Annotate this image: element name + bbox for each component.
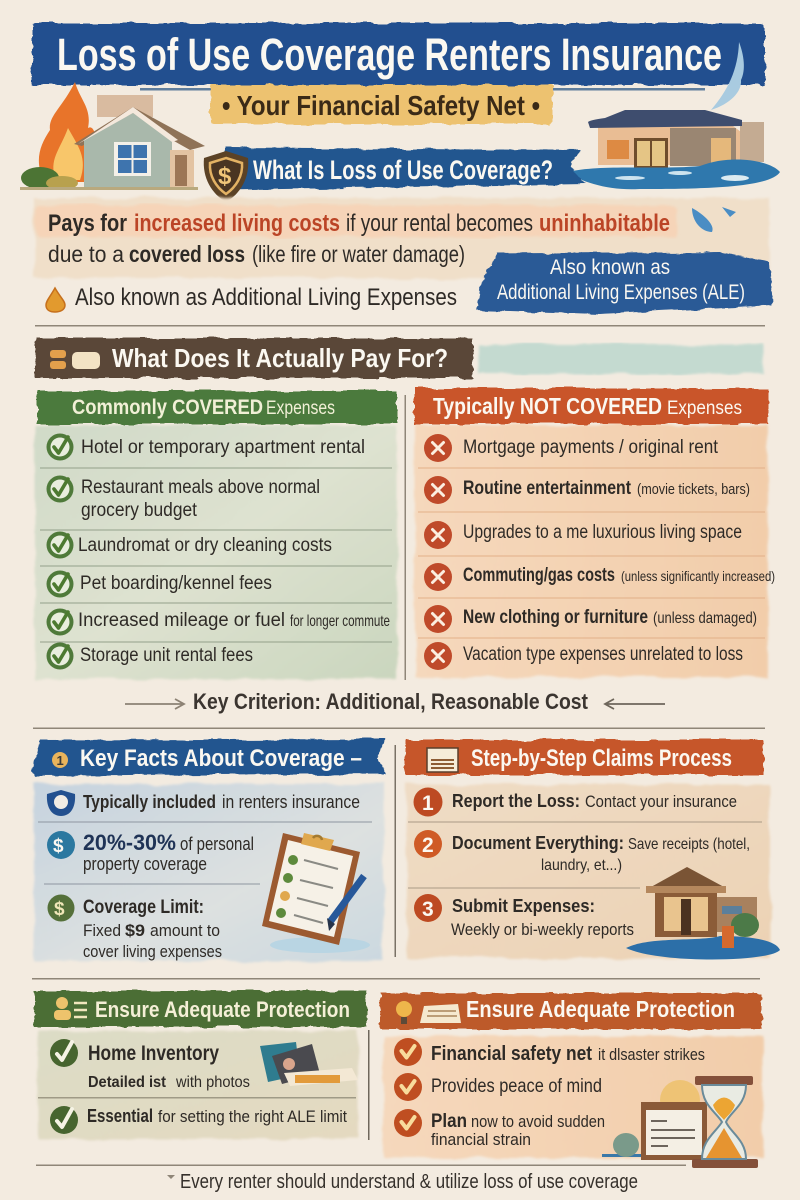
step 3: Weekly or bi-weekly reports — [451, 920, 634, 939]
item: plan now: Plan — [431, 1111, 467, 1132]
step 1: 1 — [422, 792, 434, 815]
item: hotel: Hotel or temporary apartment rental — [81, 437, 365, 458]
fact: percent — [47, 830, 254, 874]
icon: house on fire — [20, 82, 205, 190]
footer: Every renter should understand & utilize loss of use coverage — [180, 1171, 638, 1193]
item: pet boarding: Pet boarding/kennel fees — [80, 573, 272, 594]
panel: ensure adequate protection, green: Ensure Adequate Protection — [95, 997, 350, 1022]
panel: commonly covered expenses — [35, 391, 397, 679]
subtitle ribbon: • Your Financial Safety Net • — [222, 90, 540, 121]
step 3 — [414, 894, 634, 939]
panel: definition — [34, 198, 769, 278]
panel: commonly covered expenses: Expenses — [266, 398, 335, 419]
item: mileage — [46, 608, 390, 636]
item: entertainment: Routine entertainment — [463, 478, 632, 499]
fact: percent: property coverage — [83, 854, 207, 874]
item: essential — [50, 1106, 347, 1134]
panel: typically not covered expenses: Typically NOT COVERED — [433, 393, 662, 419]
callout: ALE: Additional Living Expenses (ALE) — [497, 281, 745, 304]
panel: key facts about coverage: Key Facts About Coverage – — [80, 745, 362, 772]
item: safety net: Financial safety net — [431, 1043, 592, 1065]
fact: limit: amount to — [150, 921, 220, 940]
item: clothing — [424, 605, 757, 633]
item: hotel — [46, 434, 365, 460]
step 2 — [414, 830, 750, 874]
item: essential: Essential — [87, 1106, 153, 1126]
subtitle ribbon — [140, 85, 705, 124]
item: peace of mind: Provides peace of mind — [431, 1076, 602, 1097]
item: commuting: Commuting/gas costs — [463, 565, 615, 586]
item: vacation: Vacation type expenses unrelated to loss — [463, 644, 743, 665]
icon: flooded house — [626, 867, 780, 960]
fact: limit: $ — [54, 899, 65, 920]
section heading: what is loss of use coverage: What Is Loss of Use Coverage? — [253, 155, 553, 185]
item: pet boarding — [46, 570, 272, 598]
fact: percent: $ — [53, 836, 64, 857]
panel: definition: increased living costs — [134, 210, 340, 237]
item: storage — [46, 642, 253, 670]
item: essential: for setting the right ALE limit — [158, 1107, 347, 1126]
icon: hourglass and document — [602, 1076, 758, 1168]
fact: limit: Fixed — [83, 921, 121, 940]
item: mileage: Increased mileage or fuel — [78, 610, 285, 631]
panel: ensure adequate protection, orange — [380, 993, 763, 1168]
item: home inventory: with photos — [175, 1074, 250, 1091]
fact: percent: of personal — [180, 834, 254, 854]
panel: step-by-step claims process: Step-by-Step Claims Process — [471, 745, 732, 772]
item: home inventory: Home Inventory — [88, 1042, 219, 1065]
fact: percent: 20%-30% — [83, 830, 176, 855]
item: upgrades — [424, 521, 742, 549]
icon: documents and photos — [260, 1042, 358, 1086]
step 2: Document Everything: — [452, 833, 624, 853]
fact: included: Typically included — [83, 792, 216, 812]
note: also known as: Also known as Additional Living Expenses — [75, 284, 457, 311]
icon: flooded building — [568, 110, 780, 189]
step 2: Save receipts (hotel, — [628, 836, 750, 853]
key criterion: Key Criterion: Additional, Reasonable Cost — [193, 689, 589, 714]
item: laundromat: Laundromat or dry cleaning costs — [78, 535, 332, 556]
item: clothing: New clothing or furniture — [463, 607, 648, 628]
section heading: what is loss of use coverage: $ — [218, 163, 232, 190]
item: mileage: for longer commute — [290, 613, 390, 630]
panel: definition: (like fire or water damage) — [252, 241, 465, 267]
panel: ensure adequate protection, orange: Ensure Adequate Protection — [466, 996, 735, 1022]
callout: ALE: Also known as — [550, 256, 670, 279]
item: plan now — [394, 1109, 605, 1149]
step 3: Submit Expenses: — [452, 896, 595, 916]
item: upgrades: Upgrades to a me luxurious living space — [463, 522, 742, 543]
step 2: 2 — [422, 834, 434, 857]
panel: definition: Pays for — [48, 210, 127, 237]
fact: included — [47, 790, 360, 816]
item: safety net: it dlsaster strikes — [598, 1045, 705, 1064]
item: home inventory — [50, 1039, 250, 1091]
fact: included: in renters insurance — [222, 792, 360, 812]
step 1: Contact your insurance — [585, 792, 737, 811]
panel: typically not covered expenses — [414, 388, 775, 677]
step 1 — [414, 788, 737, 816]
panel: definition: due to a — [48, 241, 124, 267]
item: entertainment: (movie tickets, bars) — [637, 481, 750, 498]
section heading: what is loss of use coverage — [204, 148, 586, 202]
item: vacation — [424, 642, 743, 670]
item: mortgage: Mortgage payments / original rent — [463, 437, 719, 458]
panel: key facts about coverage — [32, 739, 385, 961]
panel: ensure adequate protection, green — [34, 991, 366, 1139]
section heading: what does it actually pay for — [35, 338, 763, 378]
item: restaurant meals — [46, 476, 320, 521]
panel: step-by-step claims process — [405, 740, 780, 960]
fact: limit: Coverage Limit: — [83, 897, 204, 918]
item: restaurant meals: grocery budget — [81, 500, 198, 521]
fact: limit — [48, 894, 222, 961]
panel: commonly covered expenses: Commonly COVERED — [72, 396, 263, 419]
item: safety net — [394, 1038, 705, 1066]
item: laundromat — [46, 532, 332, 558]
step 1: Report the Loss: — [452, 791, 580, 811]
item: entertainment — [424, 476, 750, 504]
item: mortgage — [424, 434, 719, 462]
item: plan now: now to avoid sudden — [471, 1112, 605, 1131]
panel: definition: uninhabitable — [539, 210, 670, 237]
section heading: what does it actually pay for: What Does It Actually Pay For? — [112, 343, 448, 373]
panel: definition: if your rental becomes — [346, 210, 533, 237]
fact: limit: cover living expenses — [83, 942, 222, 961]
callout: ALE — [476, 207, 772, 314]
item: home inventory: Detailed ist — [88, 1074, 167, 1091]
item: storage: Storage unit rental fees — [80, 645, 253, 666]
item: plan now: financial strain — [431, 1130, 531, 1149]
panel: typically not covered expenses: Expenses — [667, 398, 742, 419]
step 2: laundry, et...) — [541, 857, 622, 874]
item: restaurant meals: Restaurant meals above normal — [81, 477, 320, 498]
item: peace of mind — [394, 1073, 602, 1101]
title banner — [32, 23, 765, 110]
fact: limit: $9 — [125, 921, 145, 940]
item: commuting — [424, 563, 775, 591]
icon: clipboard — [262, 833, 370, 953]
step 3: 3 — [422, 898, 434, 921]
item: clothing: (unless damaged) — [653, 610, 757, 627]
panel: definition: covered loss — [129, 241, 245, 267]
panel: key facts about coverage: 1 — [56, 753, 64, 768]
